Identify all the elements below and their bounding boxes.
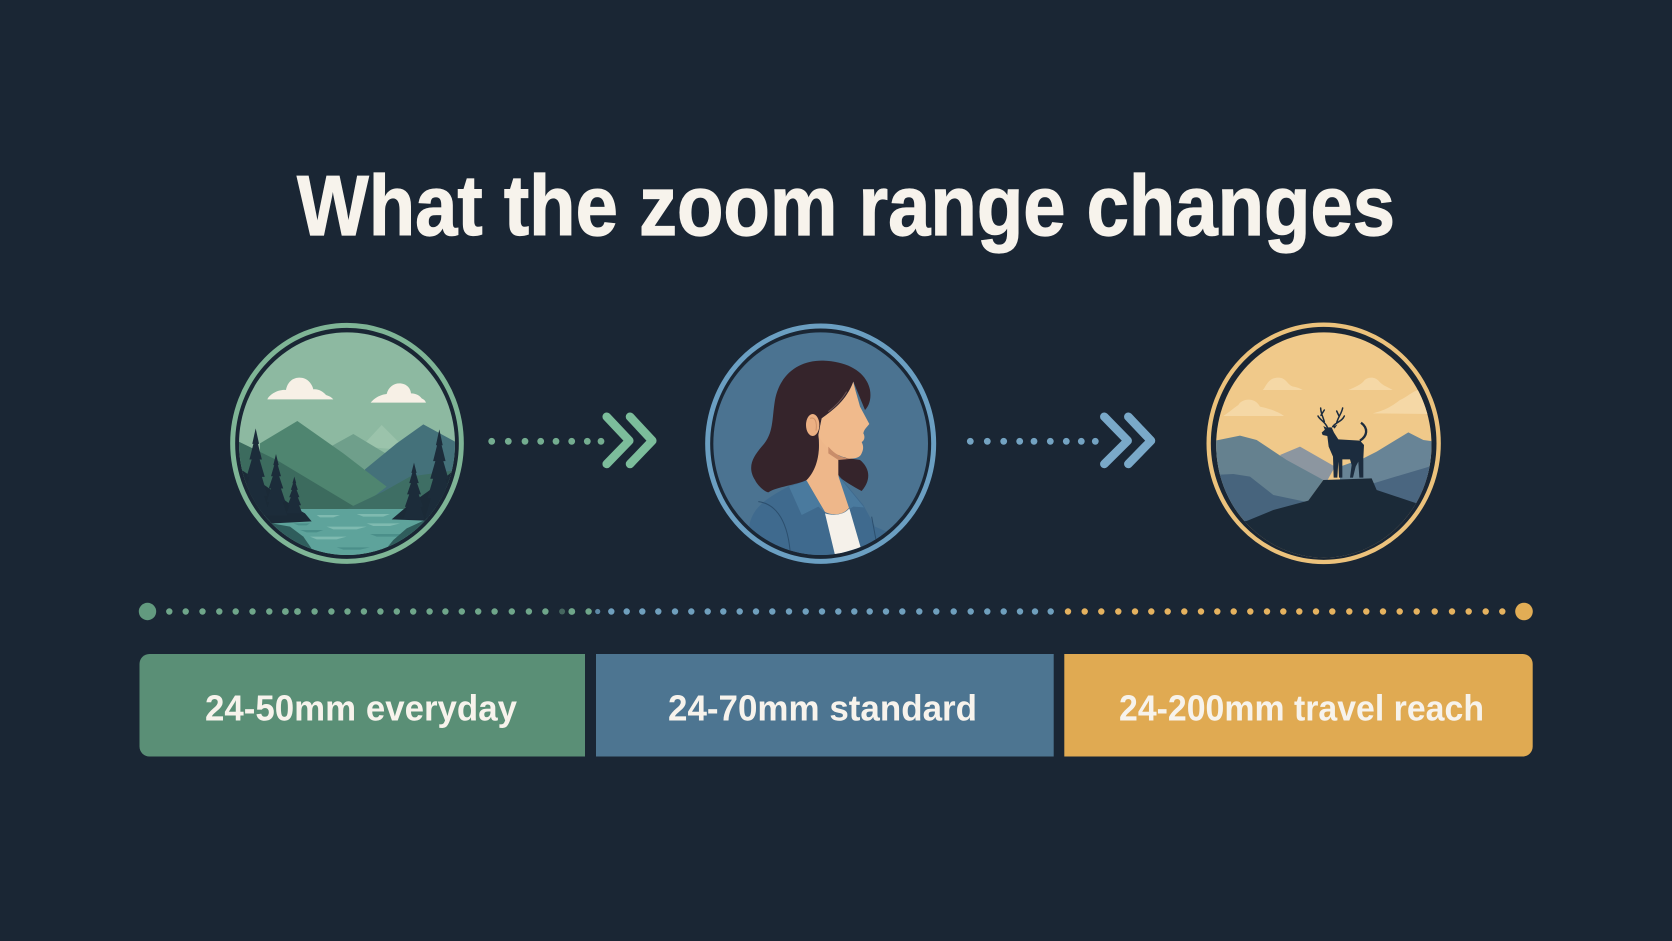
timeline: green dots: [139, 603, 592, 620]
title: What the zoom range changes: [297, 159, 1395, 254]
bar: 24-70mm standard: 24-70mm standard: [668, 688, 977, 728]
scene: mountains and hill: [1213, 330, 1437, 563]
panel: wide landscape circle: [233, 325, 461, 561]
bar: 24-200mm travel reach: [1064, 654, 1533, 756]
icon: cloud right: [371, 383, 426, 403]
bar: 24-70mm standard: [596, 654, 1054, 756]
bar: 24-50mm everyday: [140, 654, 585, 756]
trees: left group: [247, 428, 302, 514]
trees: right group: [405, 430, 448, 518]
scene: mountains and lake: [237, 330, 460, 560]
ring: green: [233, 325, 461, 561]
arrow: green dotted to chevrons: [488, 417, 652, 464]
bar: 24-50mm everyday: 24-50mm everyday: [205, 688, 517, 728]
timeline: blue dots: [595, 608, 1054, 615]
hill silhouette: [1244, 478, 1416, 558]
icon: cloud left: [267, 378, 333, 399]
bar: 24-200mm travel reach: 24-200mm travel reach: [1119, 688, 1484, 728]
icon: deer silhouette: [1318, 408, 1366, 478]
timeline: gold dots: [1065, 603, 1533, 620]
scene: portrait of woman: [710, 330, 933, 560]
arrow: blue dotted to chevrons: [967, 417, 1151, 464]
ring: blue: [708, 326, 934, 561]
panel: telephoto deer circle: [1209, 325, 1439, 563]
panel: standard portrait circle: [708, 326, 934, 561]
ring: gold: [1209, 325, 1439, 562]
